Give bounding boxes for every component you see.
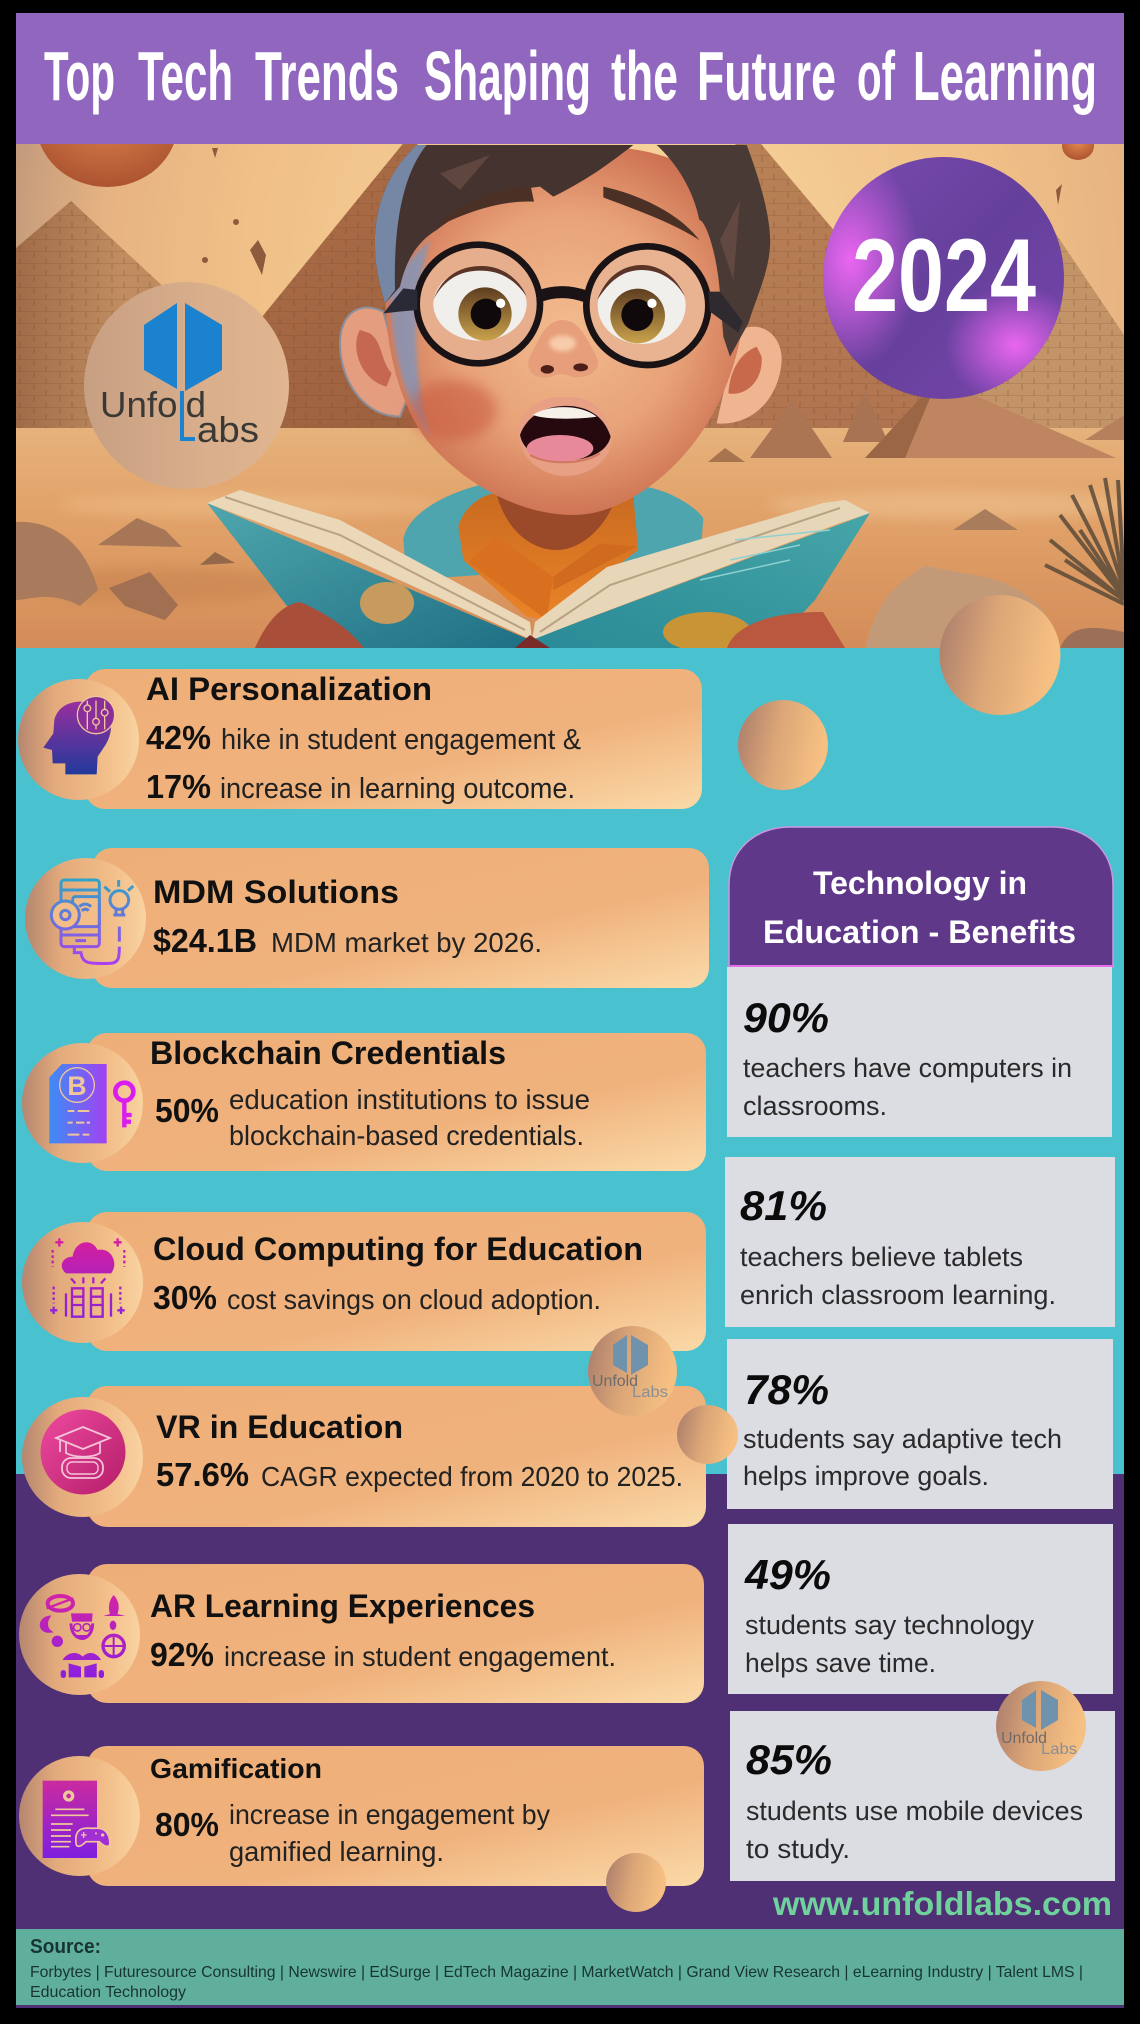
logo: Unfold Labs: Unfold <box>100 384 206 425</box>
stat: 78%: 78% <box>744 1366 829 1413</box>
icon: cloud and book <box>50 1238 125 1317</box>
planet top left <box>40 144 174 187</box>
glasses <box>383 245 743 365</box>
card: AR Learning Experiences <box>19 1564 704 1703</box>
title: the <box>611 37 678 115</box>
title: Trends <box>255 37 399 115</box>
rocks <box>16 509 1124 648</box>
desert plant <box>1045 478 1124 604</box>
stat: 49%: helps save time. <box>745 1648 936 1678</box>
title: Top <box>44 37 115 115</box>
card: Gamification: Gamification <box>150 1753 322 1784</box>
pyramids <box>16 144 1124 428</box>
title: Tech <box>138 37 233 115</box>
card: Blockchain Credentials: 50% <box>155 1092 219 1129</box>
logo: Unfold Labs: abs <box>197 409 259 450</box>
panel header: Technology in <box>813 865 1027 901</box>
eyebrows <box>437 186 699 240</box>
book <box>207 490 870 652</box>
source bar: Source: <box>30 1936 101 1958</box>
boy <box>340 145 782 620</box>
card: VR in Education <box>22 1386 706 1527</box>
icon: phone and bulb <box>51 880 133 964</box>
nose <box>528 320 598 378</box>
source bar: Education Technology <box>30 1984 186 2001</box>
card: AR Learning Experiences: increase in student engagement. <box>224 1641 616 1672</box>
card: AR Learning Experiences: 92% <box>150 1636 214 1673</box>
small pyramids <box>708 392 1124 462</box>
card: AI Personalization: 17% <box>146 768 211 805</box>
icon: game document <box>43 1781 110 1858</box>
source bar: Forbytes | Futuresource Consulting | Newswire | EdSurge | EdTech Magazine | MarketWatch | Grand View Research | eLearning Industry | Talent LMS | <box>30 1964 1083 1981</box>
icon: VR graduation <box>40 1410 126 1494</box>
stat: 90%: 90% <box>743 994 829 1041</box>
hair <box>375 145 770 357</box>
stat: 49%: students say technology <box>745 1610 1034 1640</box>
card: Blockchain Credentials <box>22 1033 706 1171</box>
desert sand <box>16 428 1124 648</box>
card: Cloud Computing for Education: 30% <box>153 1279 217 1316</box>
card: Blockchain Credentials: education institutions to issue <box>229 1084 590 1115</box>
card: Cloud Computing for Education <box>22 1212 706 1351</box>
lens <box>420 248 534 360</box>
ears <box>340 307 782 424</box>
watermark logo on benefits panel: Unfold <box>1001 1730 1047 1747</box>
card: Blockchain Credentials: blockchain-based credentials. <box>229 1120 584 1151</box>
title banner <box>16 13 1124 144</box>
card: AI Personalization: AI Personalization <box>146 671 432 707</box>
year: 2024 <box>852 218 1036 334</box>
stat: 81%: 81% <box>740 1182 827 1229</box>
decorative ball large <box>940 595 1060 715</box>
card: Gamification: 80% <box>155 1806 219 1843</box>
logo: Unfold Labs <box>84 282 289 489</box>
card: AR Learning Experiences: AR Learning Experiences <box>150 1588 535 1624</box>
stat: 49%: 49% <box>744 1551 831 1598</box>
torso <box>403 485 703 620</box>
title: Future <box>697 37 836 115</box>
side shading <box>390 240 430 437</box>
stat: 81%: teachers believe tablets <box>740 1242 1023 1272</box>
icon: AR learner <box>41 1595 125 1678</box>
decorative ball small <box>738 700 828 790</box>
card: Gamification: increase in engagement by <box>229 1799 550 1830</box>
card: AI Personalization: 42% <box>146 719 211 756</box>
hands <box>255 602 364 648</box>
watermark logo on cards <box>588 1326 677 1416</box>
card: MDM Solutions: $24.1B <box>153 922 257 959</box>
card: VR in Education: VR in Education <box>156 1409 403 1445</box>
card: Cloud Computing for Education: cost savings on cloud adoption. <box>227 1284 601 1315</box>
watermark logo on benefits panel: Labs <box>1041 1741 1077 1758</box>
hero illustration: boy reading in the desert <box>16 144 1124 648</box>
stat: 85% <box>730 1711 1115 1881</box>
stat: 90% <box>727 967 1112 1137</box>
card: MDM Solutions <box>25 848 709 988</box>
stat: 78%: students say adaptive tech <box>743 1424 1062 1454</box>
watermark logo on cards: Unfold <box>592 1373 638 1390</box>
year badge <box>823 157 1064 399</box>
stat: 78% <box>727 1339 1113 1509</box>
background bands <box>16 648 1124 1929</box>
card: VR in Education: 57.6% <box>156 1456 249 1493</box>
stat: 85%: students use mobile devices <box>746 1796 1083 1826</box>
stat: 78%: helps improve goals. <box>743 1461 989 1491</box>
card: Gamification: gamified learning. <box>229 1836 444 1867</box>
stat: 90%: classrooms. <box>743 1091 887 1121</box>
card: AI Personalization: increase in learning outcome. <box>220 773 575 805</box>
title: Shaping <box>424 37 591 115</box>
card: Cloud Computing for Education: Cloud Computing for Education <box>153 1231 643 1267</box>
face <box>385 145 745 515</box>
mouth <box>518 397 612 476</box>
eyes <box>433 265 686 344</box>
card: AI Personalization: hike in student engagement & <box>221 724 581 756</box>
icon: AI head <box>43 696 115 774</box>
panel header: Education - Benefits <box>763 914 1076 950</box>
stat: 85%: 85% <box>746 1736 832 1783</box>
stat: 81% <box>725 1157 1115 1327</box>
title: of <box>857 37 895 115</box>
stat: 49% <box>728 1524 1113 1694</box>
icon: bitcoin document and key: B <box>67 1071 87 1101</box>
panel header <box>729 827 1113 968</box>
panel: benefits <box>725 827 1115 1881</box>
decorative ball on gamification card <box>606 1853 666 1912</box>
watermark logo on cards: Labs <box>632 1384 668 1401</box>
website url: www.unfoldlabs.com <box>772 1885 1112 1922</box>
decorative ball between panels <box>677 1405 738 1464</box>
flying rocks <box>202 148 1062 275</box>
stat: 85%: to study. <box>746 1834 850 1864</box>
card: AI Personalization <box>18 669 702 809</box>
watermark logo on benefits panel <box>996 1681 1086 1771</box>
stat: 90%: teachers have computers in <box>743 1053 1072 1083</box>
card: Gamification <box>19 1746 704 1886</box>
icon: bitcoin document and key <box>49 1064 133 1143</box>
stat: 81%: enrich classroom learning. <box>740 1280 1056 1310</box>
card: Blockchain Credentials: Blockchain Credentials <box>150 1035 506 1071</box>
title <box>44 37 1097 115</box>
source bar <box>16 1929 1124 2008</box>
card: VR in Education: CAGR expected from 2020 to 2025. <box>261 1461 683 1492</box>
card: MDM Solutions: MDM Solutions <box>153 874 399 910</box>
card: MDM Solutions: MDM market by 2026. <box>271 927 542 958</box>
